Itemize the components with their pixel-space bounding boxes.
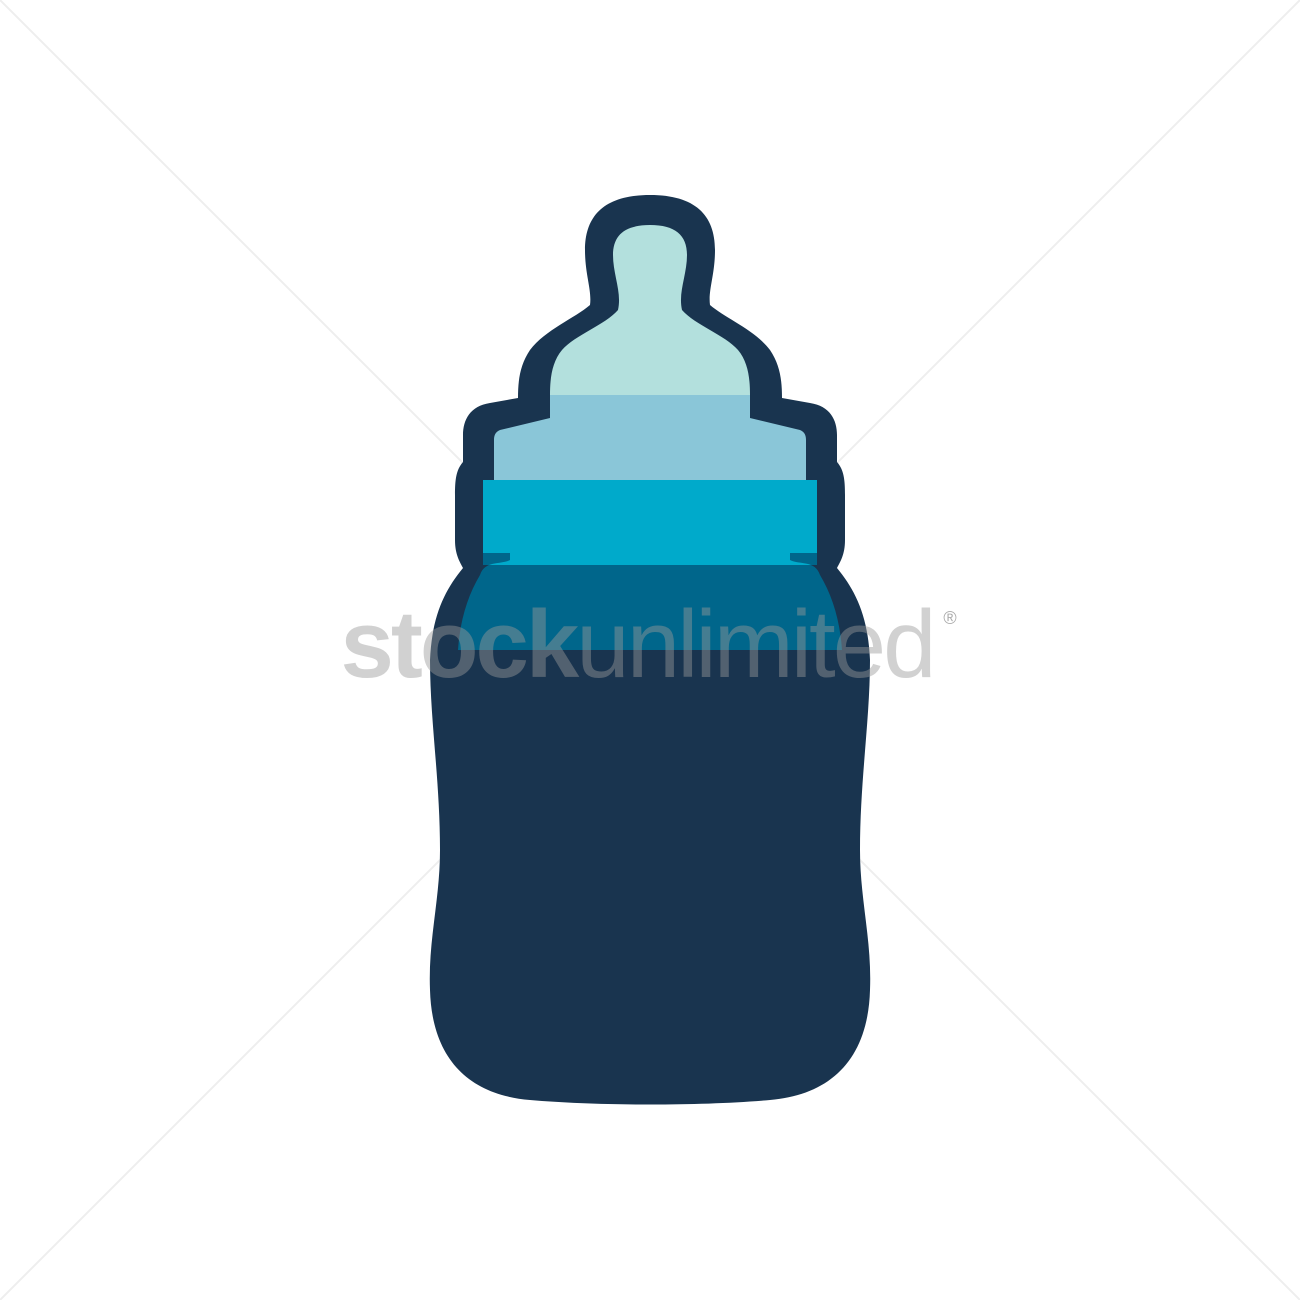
collar band: [494, 395, 806, 480]
watermark: ®: [943, 608, 957, 628]
watermark: stockunlimited: [341, 591, 933, 698]
bottle outline: [430, 195, 870, 1104]
bottle: [430, 195, 870, 1104]
ring band: [483, 480, 817, 565]
shoulder band: [458, 553, 842, 650]
nipple: [550, 225, 750, 395]
